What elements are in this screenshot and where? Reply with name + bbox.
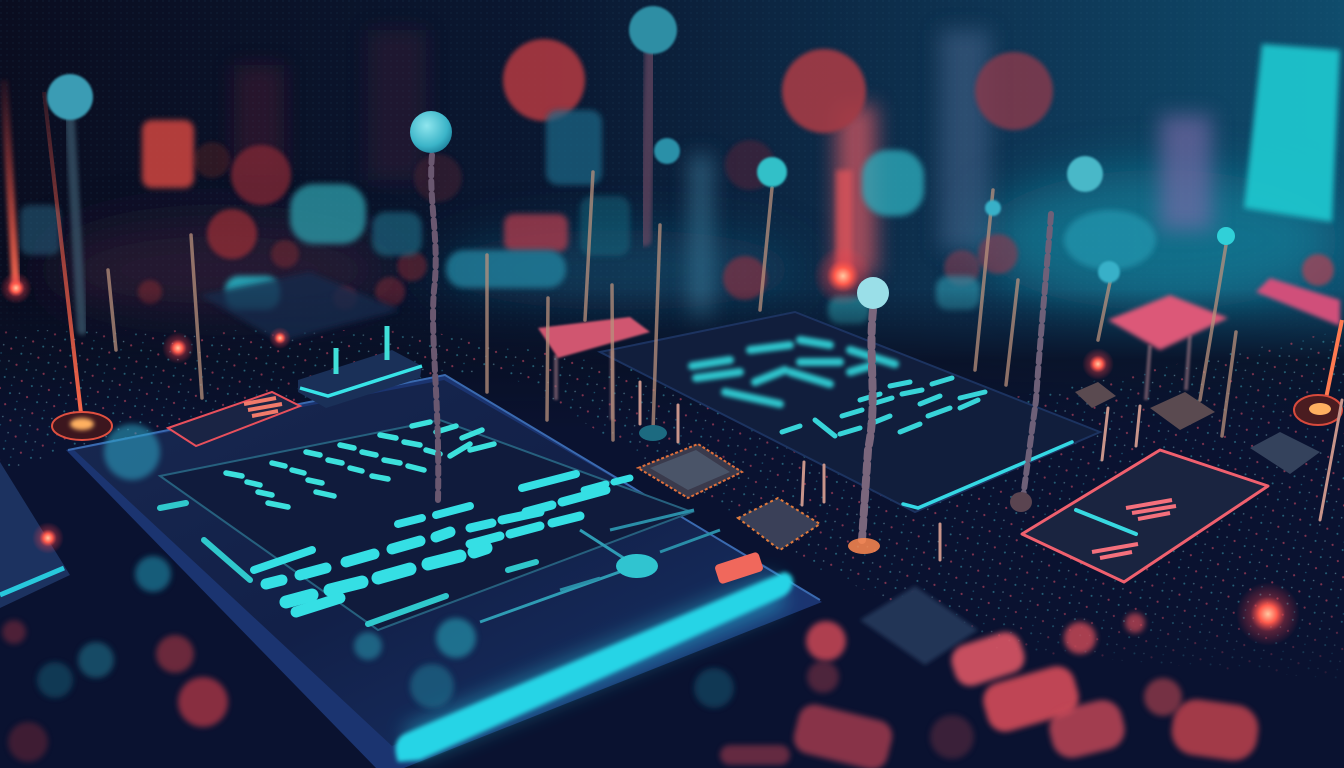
chip: lower — [738, 498, 820, 550]
small data dashes upper — [226, 422, 494, 507]
chips on board — [638, 382, 1320, 665]
board outline — [68, 375, 820, 600]
pole — [44, 92, 82, 422]
pink floating pads — [538, 278, 1340, 420]
stem: back left — [70, 120, 82, 330]
pad: far right — [1256, 278, 1340, 326]
red pole left — [44, 92, 112, 440]
inner screen panel — [160, 420, 692, 630]
card cyan bar — [1076, 510, 1136, 534]
large data glyphs lower — [254, 474, 630, 612]
short stems — [640, 382, 1342, 560]
stem: top centre — [645, 50, 651, 240]
red pole right — [1294, 320, 1342, 425]
base glow — [70, 418, 94, 430]
board surface — [600, 312, 1100, 512]
sharp data glyphs front — [782, 378, 985, 436]
card pink lines — [1092, 500, 1176, 558]
chip: far right — [1250, 432, 1320, 474]
foreground bokeh: teal blobs — [37, 556, 734, 708]
pad legs — [556, 335, 1190, 420]
dark floor base — [0, 430, 1344, 768]
board cyan edge — [903, 442, 1072, 508]
left connector lines — [160, 503, 536, 624]
chip prongs — [336, 326, 387, 374]
chip: bottom dark — [860, 586, 978, 665]
glowing orbs — [47, 6, 1235, 309]
right trace lines — [560, 510, 720, 590]
pad: centre — [538, 317, 650, 358]
chip: tiny — [1075, 382, 1116, 408]
left edge board — [0, 462, 70, 608]
cyan node — [616, 554, 658, 578]
chip: centre — [638, 444, 742, 498]
red label chip — [714, 551, 764, 585]
red pole far left — [0, 80, 32, 304]
board base — [66, 374, 822, 768]
small red lights — [32, 327, 1300, 646]
bokeh: large red circles — [138, 39, 1334, 310]
cyan front edge — [396, 572, 793, 762]
bokeh: red rounded blocks — [142, 120, 568, 252]
bokeh: cyan blocks and circles — [20, 44, 1340, 324]
card body — [1022, 450, 1268, 582]
blurred background towers — [234, 30, 1212, 320]
pink outlined card — [1022, 450, 1268, 582]
red corner tag — [168, 392, 300, 446]
stem: right — [1022, 214, 1051, 505]
background platform left — [200, 272, 400, 342]
red glow pole centre — [813, 170, 873, 306]
pad: right — [1108, 295, 1228, 350]
glass stems — [70, 50, 1342, 560]
chip: right — [1150, 392, 1215, 430]
thin stems — [108, 172, 1236, 440]
stem: main — [431, 155, 438, 500]
main data board — [66, 374, 822, 768]
cyan edge glow — [410, 590, 780, 744]
board surface — [74, 380, 794, 746]
dark mid-ground band — [0, 290, 1344, 430]
blurred data glyphs back — [692, 340, 895, 404]
stem: mid — [862, 310, 873, 540]
chip cyan edge — [300, 366, 422, 396]
node with trace — [480, 530, 636, 622]
cyan blur spot on board — [104, 424, 160, 480]
right data board — [600, 312, 1100, 512]
base ring — [52, 412, 112, 440]
stem bases — [639, 425, 1032, 554]
foreground bokeh: pink blobs — [2, 613, 1261, 768]
background dot texture — [0, 0, 1344, 330]
ambient haze — [50, 170, 1340, 320]
red tag bars — [244, 398, 282, 416]
raised cyan chip — [298, 326, 422, 408]
circuit speckle field — [0, 330, 1344, 680]
chip body — [298, 350, 422, 408]
